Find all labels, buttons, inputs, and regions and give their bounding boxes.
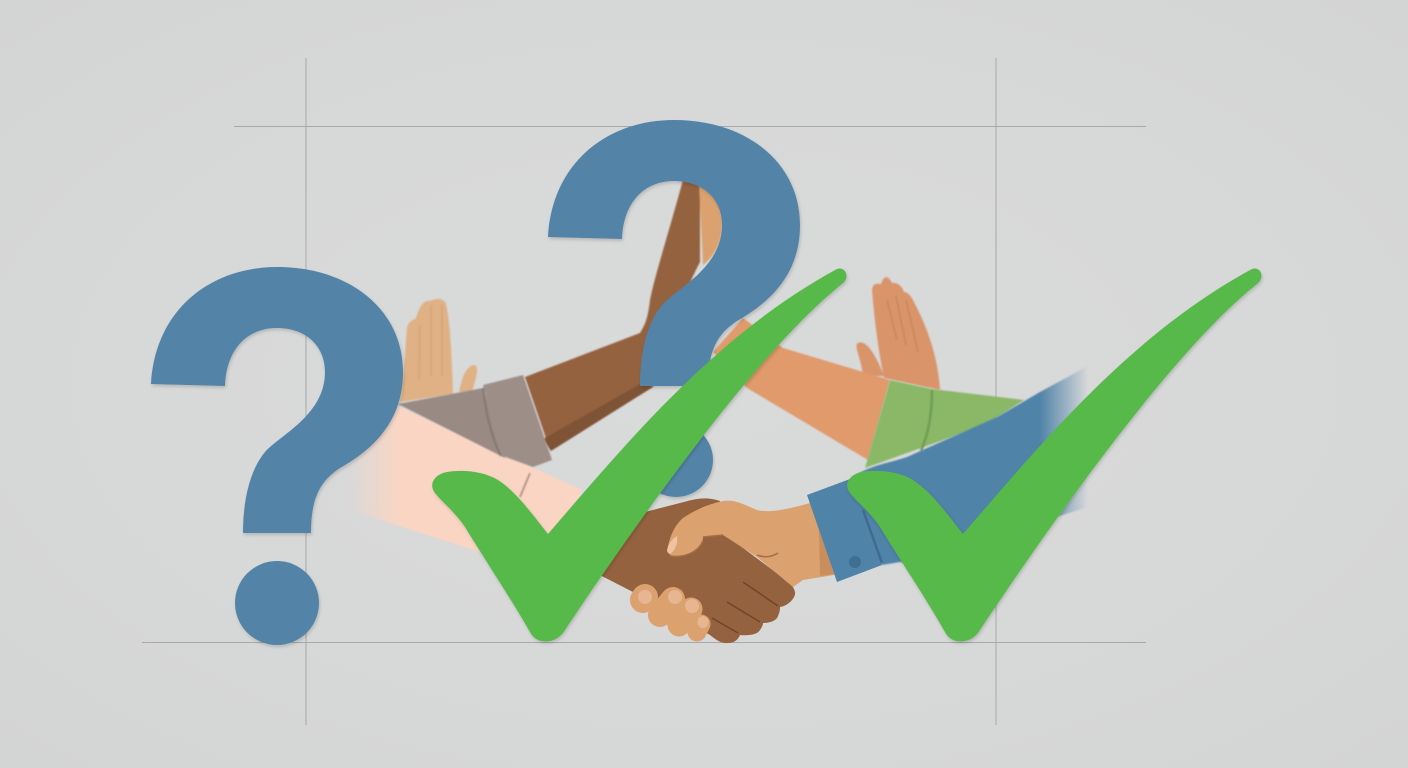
wrist shadow: [819, 530, 834, 576]
brown hand: [590, 498, 795, 643]
blue sleeve: [853, 366, 1088, 570]
grey sleeve with cuff: [398, 375, 552, 467]
tan hand: [667, 501, 840, 587]
question mark, left: [151, 267, 403, 645]
handshake: [590, 498, 840, 643]
green sleeve: [865, 380, 1024, 468]
raised orange hand, right: [856, 277, 940, 390]
thumb details: [670, 535, 778, 557]
finger nails: [638, 590, 708, 628]
blue shirt cuff: [807, 479, 882, 582]
brown raised arm and hand: [525, 180, 722, 451]
tan fingers: [643, 597, 701, 632]
question mark, centre: [548, 120, 800, 497]
raised tan hand, left: [400, 299, 477, 402]
orange forearm: [713, 318, 890, 460]
check mark, right: [847, 268, 1261, 642]
brown hand creases: [712, 582, 778, 633]
check mark, centre: [432, 268, 846, 642]
peach sleeve arm: [347, 407, 582, 565]
